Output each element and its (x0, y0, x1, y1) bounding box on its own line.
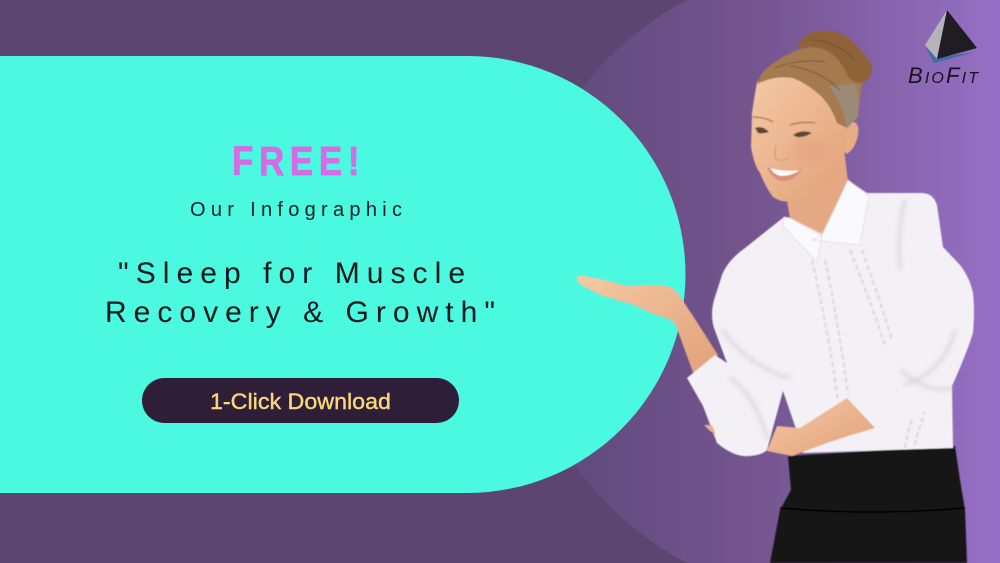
subheading: Our Infographic: Our Infographic (190, 199, 402, 221)
forearm on hip (767, 398, 875, 456)
white shirt (687, 180, 974, 456)
cheek blush (790, 136, 826, 164)
nose (775, 145, 788, 160)
lighter purple circle background (517, 0, 1000, 563)
logo wordmark: BIOFIT (908, 63, 979, 88)
heading: FREE!: FREE! (232, 139, 360, 185)
title line block (105, 257, 495, 329)
hair bun (797, 31, 872, 83)
hair (757, 47, 862, 128)
mouth (767, 167, 802, 181)
eyebrows (753, 117, 815, 125)
shirt shading (722, 200, 955, 440)
ear (840, 122, 858, 154)
woman presenting with open hand (577, 31, 974, 563)
download button: 1-Click Download (210, 389, 391, 414)
logo pyramid (925, 10, 977, 63)
teal rounded panel (0, 56, 686, 493)
face (751, 72, 850, 202)
extended arm and hand (577, 276, 718, 378)
eyes (755, 127, 812, 137)
skirt (770, 446, 967, 563)
title line block: Recovery & Growth" (105, 296, 495, 329)
collar (783, 180, 869, 262)
download button (142, 378, 459, 423)
shirt ruffles (812, 250, 925, 448)
title line block: "Sleep for Muscle (118, 257, 465, 290)
BioFit logo (908, 10, 979, 88)
neck (786, 148, 848, 236)
